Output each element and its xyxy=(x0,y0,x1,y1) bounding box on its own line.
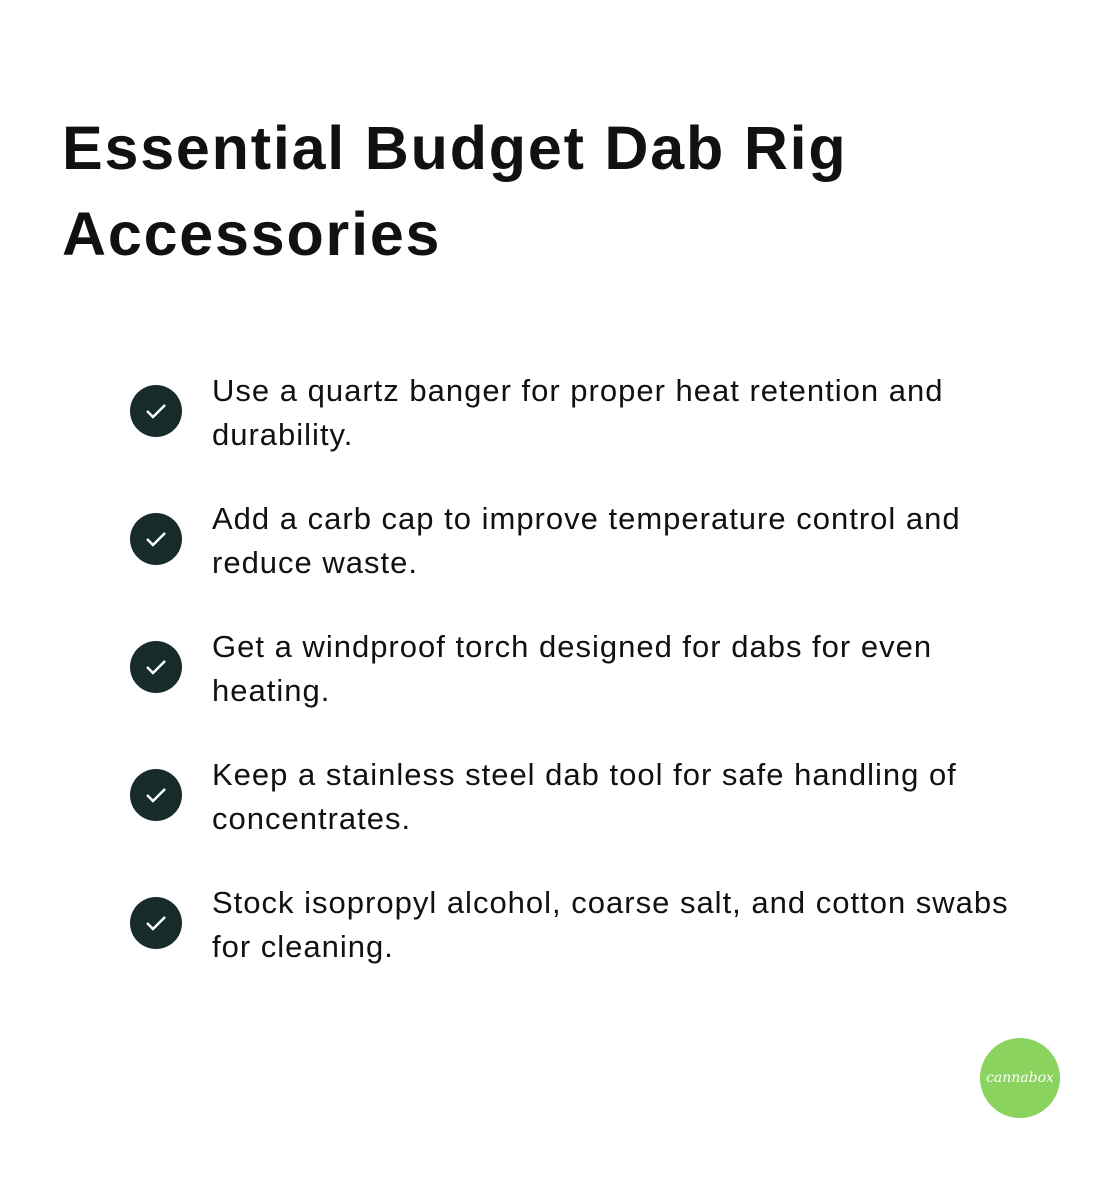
logo: cannabox xyxy=(986,1070,1054,1086)
text: durability. xyxy=(212,417,353,452)
text xyxy=(212,885,1009,964)
item 5 xyxy=(130,885,1009,964)
text: Add a carb cap to improve temperature control and xyxy=(212,501,961,536)
text: Get a windproof torch designed for dabs for even xyxy=(212,629,932,664)
item 2 xyxy=(130,501,961,580)
text: for cleaning. xyxy=(212,929,394,964)
text xyxy=(212,373,943,452)
text: Keep a stainless steel dab tool for safe handling of xyxy=(212,757,957,792)
text: Stock isopropyl alcohol, coarse salt, and cotton swabs xyxy=(212,885,1009,920)
title: Accessories xyxy=(62,200,441,268)
item 3 xyxy=(130,629,932,708)
text: Use a quartz banger for proper heat retention and xyxy=(212,373,943,408)
icon: check xyxy=(130,513,182,565)
logo xyxy=(980,1038,1060,1118)
text xyxy=(212,629,932,708)
item 1 xyxy=(130,373,943,452)
title xyxy=(62,114,847,268)
text: reduce waste. xyxy=(212,545,418,580)
text xyxy=(212,757,957,836)
item 4 xyxy=(130,757,957,836)
text xyxy=(212,501,961,580)
icon: check xyxy=(130,769,182,821)
icon: check xyxy=(130,385,182,437)
text: concentrates. xyxy=(212,801,411,836)
icon: check xyxy=(130,641,182,693)
icon: check xyxy=(130,897,182,949)
text: heating. xyxy=(212,673,330,708)
title: Essential Budget Dab Rig xyxy=(62,114,847,182)
